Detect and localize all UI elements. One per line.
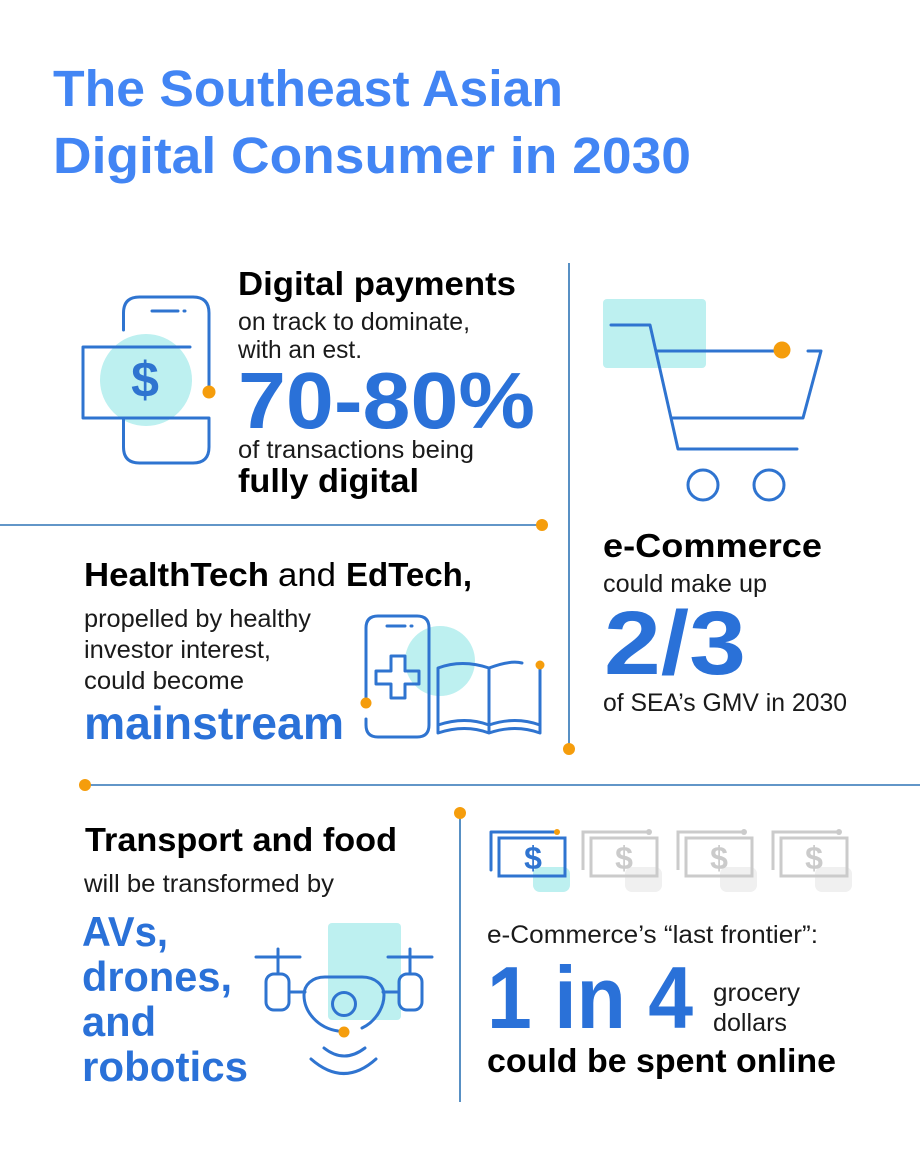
text: last frontier: e-Commerce’s “last frontier”: xyxy=(487,921,818,949)
text: propelled by investor interest xyxy=(84,605,311,695)
text: propelled by investor interest: investor interest, xyxy=(84,636,271,664)
heading: digital payments: Digital payments xyxy=(238,265,516,302)
panel: e-commerce xyxy=(603,299,847,717)
statistic: 70-80%: 70-80% xyxy=(238,356,535,445)
panel: healthtech and edtech xyxy=(84,556,544,749)
icon row: four dollar bills: $ xyxy=(710,840,728,876)
text: on track to dominate: with an est. xyxy=(237,336,362,364)
heading: transport and food: Transport and food xyxy=(85,821,397,858)
statistic: 2/3: 2/3 xyxy=(604,594,746,694)
text: could make up: could make up xyxy=(603,570,767,598)
icon: phone with dollar bill: $ xyxy=(131,352,159,408)
icon row: four dollar bills: $ xyxy=(805,840,823,876)
icon row: four dollar bills: $ xyxy=(615,840,633,876)
title xyxy=(53,60,691,184)
text: propelled by investor interest: could become xyxy=(84,667,244,695)
text: propelled by investor interest: propelled by healthy xyxy=(84,605,311,633)
statistic: 1 in 4: 1 in 4 xyxy=(487,948,693,1047)
heading: healthtech and edtech: EdTech, xyxy=(346,556,472,593)
text: grocery dollars: grocery xyxy=(713,979,801,1007)
icon: drone xyxy=(256,923,432,1074)
text: grocery dollars xyxy=(713,979,801,1037)
heading: e-commerce: e-Commerce xyxy=(603,527,822,564)
title: The Southeast Asian xyxy=(53,60,563,117)
statistic: avs, drones, and robotics: drones, xyxy=(82,953,232,1000)
statistic: avs, drones, and robotics: and xyxy=(82,998,156,1045)
icon: phone with dollar bill xyxy=(83,297,216,463)
icon: shopping cart xyxy=(603,299,821,500)
panel: digital payments xyxy=(83,265,535,499)
panel: transport and food xyxy=(82,821,432,1090)
statistic: avs, drones, and robotics: robotics xyxy=(82,1043,248,1090)
statistic: avs, drones, and robotics xyxy=(82,908,248,1090)
heading: healthtech and edtech: and xyxy=(278,556,336,593)
icon row: four dollar bills xyxy=(491,829,852,892)
heading: healthtech and edtech xyxy=(84,556,472,593)
text: of SEA's GMV in 2030: of SEA’s GMV in 2030 xyxy=(603,689,847,717)
title: Digital Consumer in 2030 xyxy=(53,127,691,184)
icon: phone with cross and book xyxy=(360,616,544,737)
heading: healthtech and edtech: HealthTech xyxy=(84,556,269,593)
text: grocery dollars: dollars xyxy=(713,1009,787,1037)
statistic: avs, drones, and robotics: AVs, xyxy=(82,908,168,955)
text: will be transformed by: will be transformed by xyxy=(83,870,335,898)
text: on track to dominate xyxy=(237,308,470,364)
text: on track to dominate: on track to dominate, xyxy=(238,308,470,336)
statistic: mainstream: mainstream xyxy=(84,697,344,749)
text: of transactions being fully digital: of transactions being xyxy=(238,436,474,464)
text: of transactions being fully digital xyxy=(238,436,474,499)
icon row: four dollar bills: $ xyxy=(524,840,542,876)
text: could be spent online: could be spent online xyxy=(487,1042,836,1079)
text: of transactions being fully digital: fully digital xyxy=(238,462,419,499)
panel: grocery last frontier xyxy=(487,829,852,1079)
